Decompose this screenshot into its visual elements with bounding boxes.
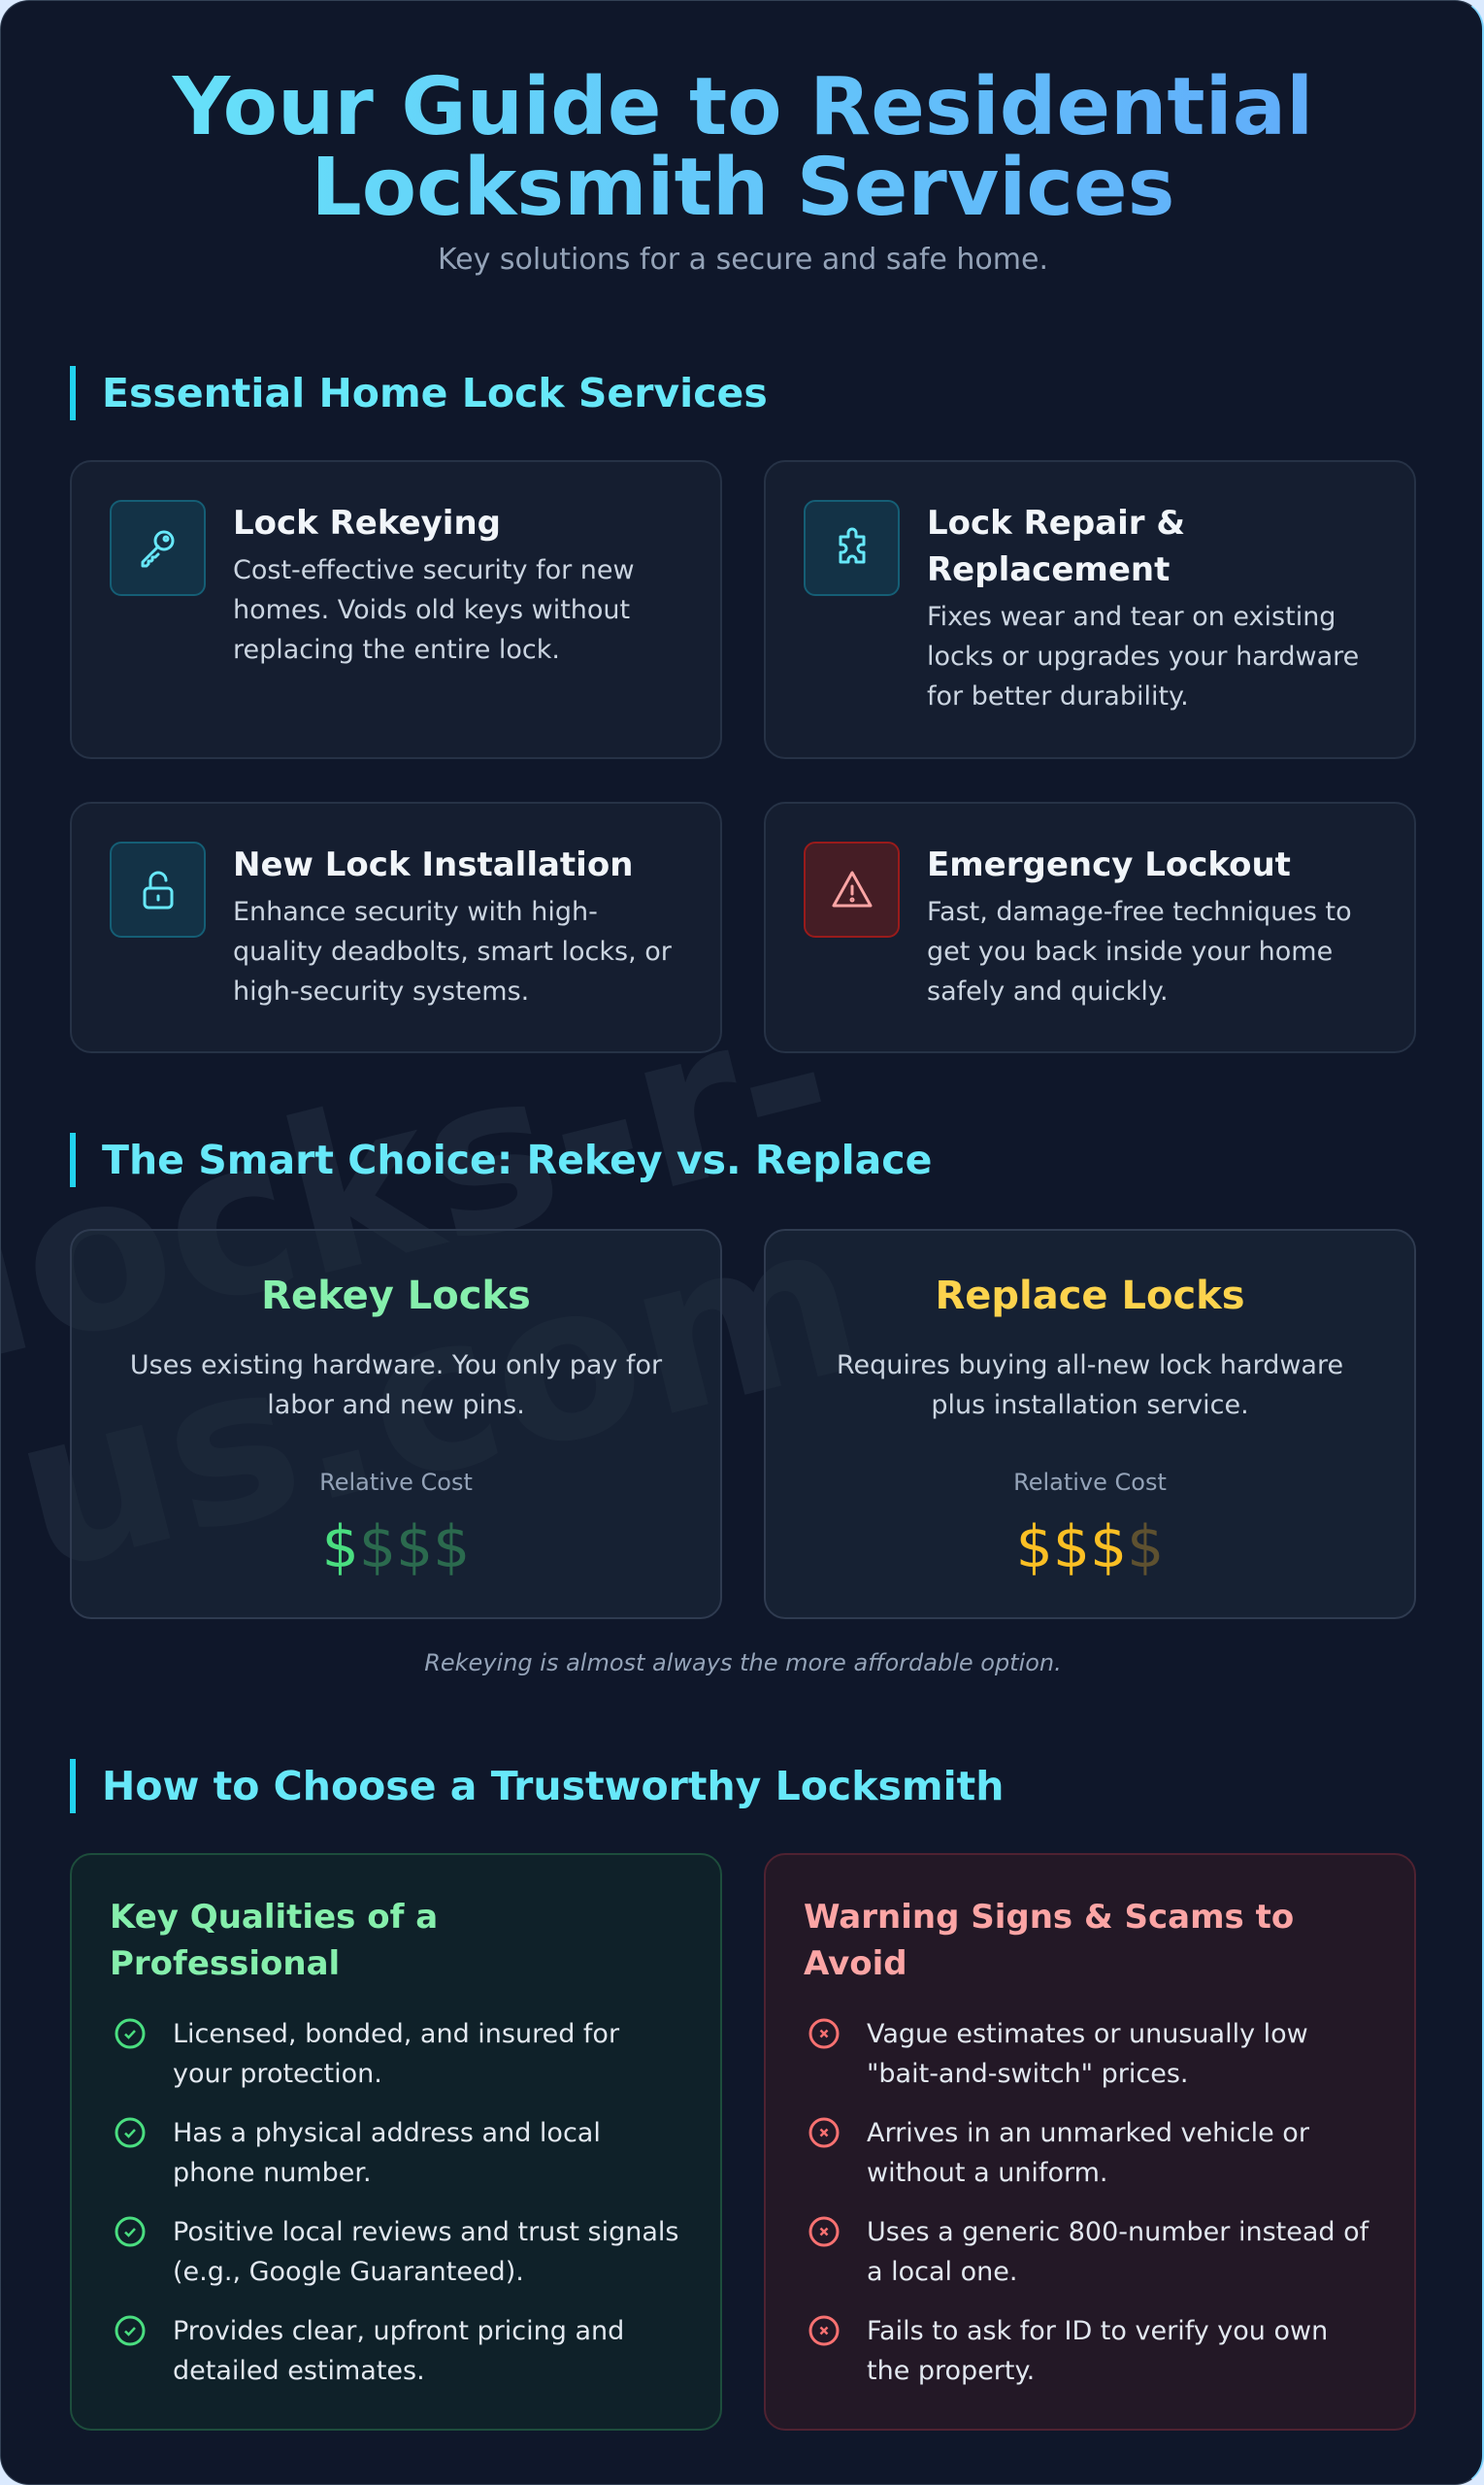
item: Provides clear, upfront pricing and — [173, 2316, 624, 2346]
card: replace: Replace Locks — [935, 1274, 1245, 1318]
card: lock repair — [764, 460, 1416, 759]
cost indicator: $$$$ — [322, 1513, 470, 1581]
item: Fails to ask for ID to verify you own — [867, 2316, 1328, 2346]
item: Has a physical address and local — [173, 2118, 601, 2148]
card: new lock installation: New Lock Installation — [233, 845, 633, 884]
card: replace: Requires buying all-new lock hardware — [837, 1350, 1343, 1380]
panel: key qualities: Key Qualities of a — [110, 1898, 438, 1937]
title: Your Guide to Residential — [173, 61, 1313, 153]
item — [809, 2019, 1308, 2089]
panel: warning signs — [764, 1853, 1416, 2431]
card: emergency lockout: Fast, damage-free techniques to get you back inside your home safely and quickly. — [927, 897, 1352, 1007]
card: rekey: Relative Cost — [319, 1469, 473, 1496]
item: (e.g., Google Guaranteed). — [173, 2257, 524, 2287]
item: Uses a generic 800-number instead of — [867, 2217, 1369, 2247]
card: lock rekeying: Lock Rekeying — [233, 504, 501, 543]
item — [115, 2316, 624, 2386]
note: Rekeying is almost always the more affordable option. — [424, 1649, 1062, 1676]
icon: warning — [804, 842, 900, 938]
panel: key qualities — [70, 1853, 722, 2431]
card: emergency lockout — [764, 802, 1416, 1053]
icon: puzzle — [804, 500, 900, 596]
card: replace: Relative Cost — [1013, 1469, 1167, 1496]
card: lock repair: Lock Repair & Replacement — [927, 504, 1185, 589]
heading: rekey vs replace: The Smart Choice: Rekey vs. Replace — [102, 1137, 932, 1183]
card: new lock installation: Enhance security with high- — [233, 897, 598, 927]
item: your protection. — [173, 2059, 382, 2089]
item: a local one. — [867, 2257, 1017, 2287]
item — [809, 2316, 1328, 2386]
card: rekey: Uses existing hardware. You only pay for — [130, 1350, 662, 1380]
card: rekey: labor and new pins. — [267, 1390, 525, 1420]
heading: trustworthy locksmith: How to Choose a Trustworthy Locksmith — [102, 1763, 1004, 1809]
card: lock repair: Fixes wear and tear on existing locks or upgrades your hardware for better durability. — [927, 602, 1359, 712]
card: new lock installation — [70, 802, 722, 1053]
item: "bait-and-switch" prices. — [867, 2059, 1189, 2089]
item: Positive local reviews and trust signals — [173, 2217, 678, 2247]
item: Arrives in an unmarked vehicle or — [867, 2118, 1309, 2148]
item — [115, 2019, 619, 2089]
card: rekey: Rekey Locks — [261, 1274, 531, 1318]
item: detailed estimates. — [173, 2356, 425, 2386]
item: phone number. — [173, 2158, 372, 2188]
card: lock rekeying — [70, 460, 722, 759]
panel: warning signs: Warning Signs & Scams to — [804, 1898, 1294, 1937]
heading: essential services: Essential Home Lock Services — [102, 370, 768, 416]
item: Vague estimates or unusually low — [867, 2019, 1308, 2049]
icon: open padlock — [110, 842, 206, 938]
item — [809, 2217, 1369, 2287]
panel: key qualities: Professional — [110, 1944, 340, 1983]
card: emergency lockout: Emergency Lockout — [927, 845, 1291, 884]
card: replace — [764, 1229, 1416, 1619]
icon: key — [110, 500, 206, 596]
item — [115, 2118, 601, 2188]
cost indicator: $$$$ — [1016, 1513, 1164, 1581]
title: Locksmith Services — [312, 142, 1174, 234]
item — [115, 2217, 678, 2287]
card: rekey — [70, 1229, 722, 1619]
watermark: us.com — [0, 1172, 883, 1619]
item: without a uniform. — [867, 2158, 1107, 2188]
card: replace: plus installation service. — [931, 1390, 1249, 1420]
panel: warning signs: Avoid — [804, 1944, 907, 1983]
item — [809, 2118, 1309, 2188]
title — [1, 67, 1484, 228]
item: the property. — [867, 2356, 1035, 2386]
card: new lock installation: quality deadbolts, smart locks, or high-security systems. — [233, 937, 672, 1007]
subtitle: Key solutions for a secure and safe home. — [438, 243, 1048, 277]
card: lock rekeying: Cost-effective security for new homes. Voids old keys without replacing the entire lock. — [233, 555, 635, 665]
item: Licensed, bonded, and insured for — [173, 2019, 619, 2049]
